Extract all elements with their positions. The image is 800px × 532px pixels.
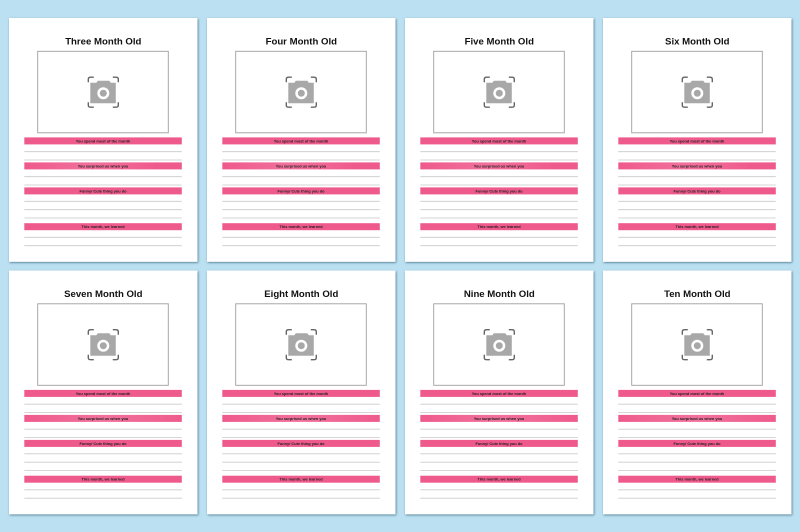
- section label: You surprised us when you: [672, 416, 723, 421]
- section label: You spend most of the month: [274, 138, 329, 143]
- heading: Four Month Old: [266, 36, 337, 48]
- panel: Five Month Old: [405, 18, 594, 262]
- icon: camera: [88, 330, 118, 360]
- section label: Funny/ Cute thing you do: [476, 188, 523, 193]
- section label: You surprised us when you: [276, 416, 327, 421]
- section label: This month, we learned: [675, 477, 719, 482]
- section label: You surprised us when you: [672, 163, 723, 168]
- icon: camera: [484, 77, 514, 107]
- section label: You surprised us when you: [276, 163, 327, 168]
- heading: Five Month Old: [465, 36, 534, 48]
- icon: camera: [286, 330, 316, 360]
- section label: You surprised us when you: [78, 163, 129, 168]
- heading: Three Month Old: [65, 36, 142, 48]
- section label: This month, we learned: [279, 477, 323, 482]
- heading: Seven Month Old: [64, 289, 143, 300]
- section label: You spend most of the month: [670, 391, 725, 396]
- section label: Funny/ Cute thing you do: [278, 188, 325, 193]
- section label: Funny/ Cute thing you do: [80, 441, 127, 446]
- icon: camera: [286, 77, 316, 107]
- section label: This month, we learned: [477, 477, 521, 482]
- panel: Eight Month Old: [207, 270, 396, 514]
- section label: You spend most of the month: [472, 391, 527, 396]
- section label: You spend most of the month: [670, 138, 725, 143]
- section label: This month, we learned: [81, 477, 125, 482]
- section label: Funny/ Cute thing you do: [674, 441, 721, 446]
- heading: Nine Month Old: [464, 289, 535, 300]
- section label: You surprised us when you: [78, 416, 129, 421]
- heading: Six Month Old: [665, 36, 730, 48]
- section label: This month, we learned: [477, 224, 521, 229]
- section label: This month, we learned: [81, 224, 125, 229]
- heading: Eight Month Old: [264, 289, 338, 300]
- section label: You surprised us when you: [474, 416, 525, 421]
- section label: This month, we learned: [675, 224, 719, 229]
- section label: This month, we learned: [279, 224, 323, 229]
- panel: Nine Month Old: [405, 270, 594, 514]
- section label: You spend most of the month: [76, 138, 131, 143]
- panel: Three Month Old: [9, 18, 198, 262]
- section label: You spend most of the month: [76, 391, 131, 396]
- section label: Funny/ Cute thing you do: [476, 441, 523, 446]
- icon: camera: [682, 330, 712, 360]
- panel: Six Month Old: [603, 18, 792, 262]
- panel: Four Month Old: [207, 18, 396, 262]
- section label: Funny/ Cute thing you do: [278, 441, 325, 446]
- panel: Seven Month Old: [9, 270, 198, 514]
- section label: You surprised us when you: [474, 163, 525, 168]
- section label: You spend most of the month: [472, 138, 527, 143]
- icon: camera: [88, 77, 118, 107]
- icon: camera: [484, 330, 514, 360]
- panel: Ten Month Old: [603, 270, 792, 514]
- icon: camera: [682, 77, 712, 107]
- section label: Funny/ Cute thing you do: [674, 188, 721, 193]
- heading: Ten Month Old: [664, 289, 731, 300]
- section label: You spend most of the month: [274, 391, 329, 396]
- section label: Funny/ Cute thing you do: [80, 188, 127, 193]
